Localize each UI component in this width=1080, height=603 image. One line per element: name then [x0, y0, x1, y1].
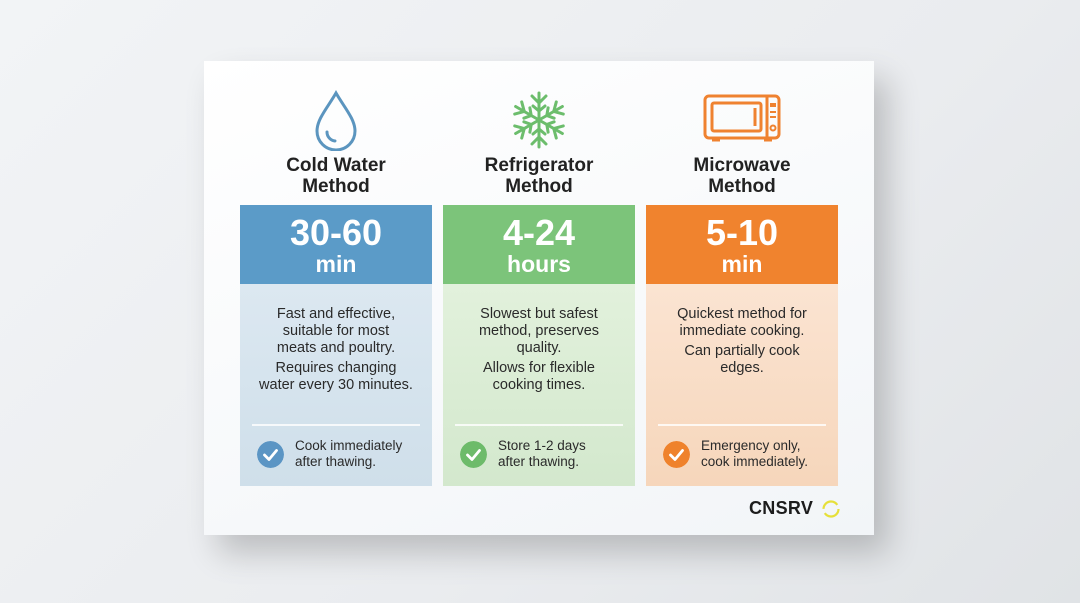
description: Allows for flexible — [483, 360, 595, 376]
title: Method — [505, 176, 573, 197]
title — [286, 155, 386, 197]
panel: cold water — [240, 90, 432, 486]
tip: Emergency only, — [701, 438, 801, 453]
description: water every 30 minutes. — [259, 377, 413, 393]
description: cooking times. — [493, 377, 585, 393]
time box: min — [316, 251, 356, 277]
body — [646, 284, 838, 486]
tip — [257, 438, 402, 469]
description: immediate cooking. — [680, 323, 804, 339]
title — [693, 155, 791, 197]
time box: hours — [507, 251, 571, 277]
description: Requires changing — [276, 360, 396, 376]
time box — [443, 205, 635, 284]
tip: after thawing. — [498, 454, 579, 469]
description: meats and poultry. — [277, 340, 395, 356]
panel: microwave — [646, 94, 838, 486]
time box — [240, 205, 432, 284]
tip: Store 1-2 days — [498, 438, 586, 453]
description: edges. — [720, 360, 764, 376]
body — [240, 284, 432, 486]
icon: microwave — [704, 94, 780, 142]
tip — [663, 438, 808, 469]
tip — [460, 438, 586, 469]
time box: 5-10 — [706, 212, 778, 253]
title: Method — [708, 176, 776, 197]
description: method, preserves — [479, 323, 599, 339]
time box: 30-60 — [290, 212, 382, 253]
panel: refrigerator — [443, 92, 635, 486]
time box — [646, 205, 838, 284]
description: Slowest but safest — [480, 306, 598, 322]
logo: CNSRV — [749, 498, 813, 518]
description: Fast and effective, — [277, 306, 395, 322]
tip: after thawing. — [295, 454, 376, 469]
description: suitable for most — [283, 323, 389, 339]
icon: snowflake — [513, 92, 565, 148]
title: Refrigerator — [485, 155, 593, 176]
description: Can partially cook — [684, 343, 800, 359]
time box: 4-24 — [503, 212, 575, 253]
title — [485, 155, 594, 197]
icon: water drop — [316, 90, 356, 151]
time box: min — [722, 251, 762, 277]
description — [259, 306, 413, 393]
title: Method — [302, 176, 370, 197]
title: Cold Water — [286, 155, 386, 176]
body — [443, 284, 635, 486]
description — [479, 306, 599, 393]
tip: Cook immediately — [295, 438, 402, 453]
description: Quickest method for — [677, 306, 807, 322]
description: quality. — [517, 340, 561, 356]
description — [677, 306, 807, 376]
tip: cook immediately. — [701, 454, 808, 469]
title: Microwave — [693, 155, 791, 176]
card — [204, 61, 874, 535]
